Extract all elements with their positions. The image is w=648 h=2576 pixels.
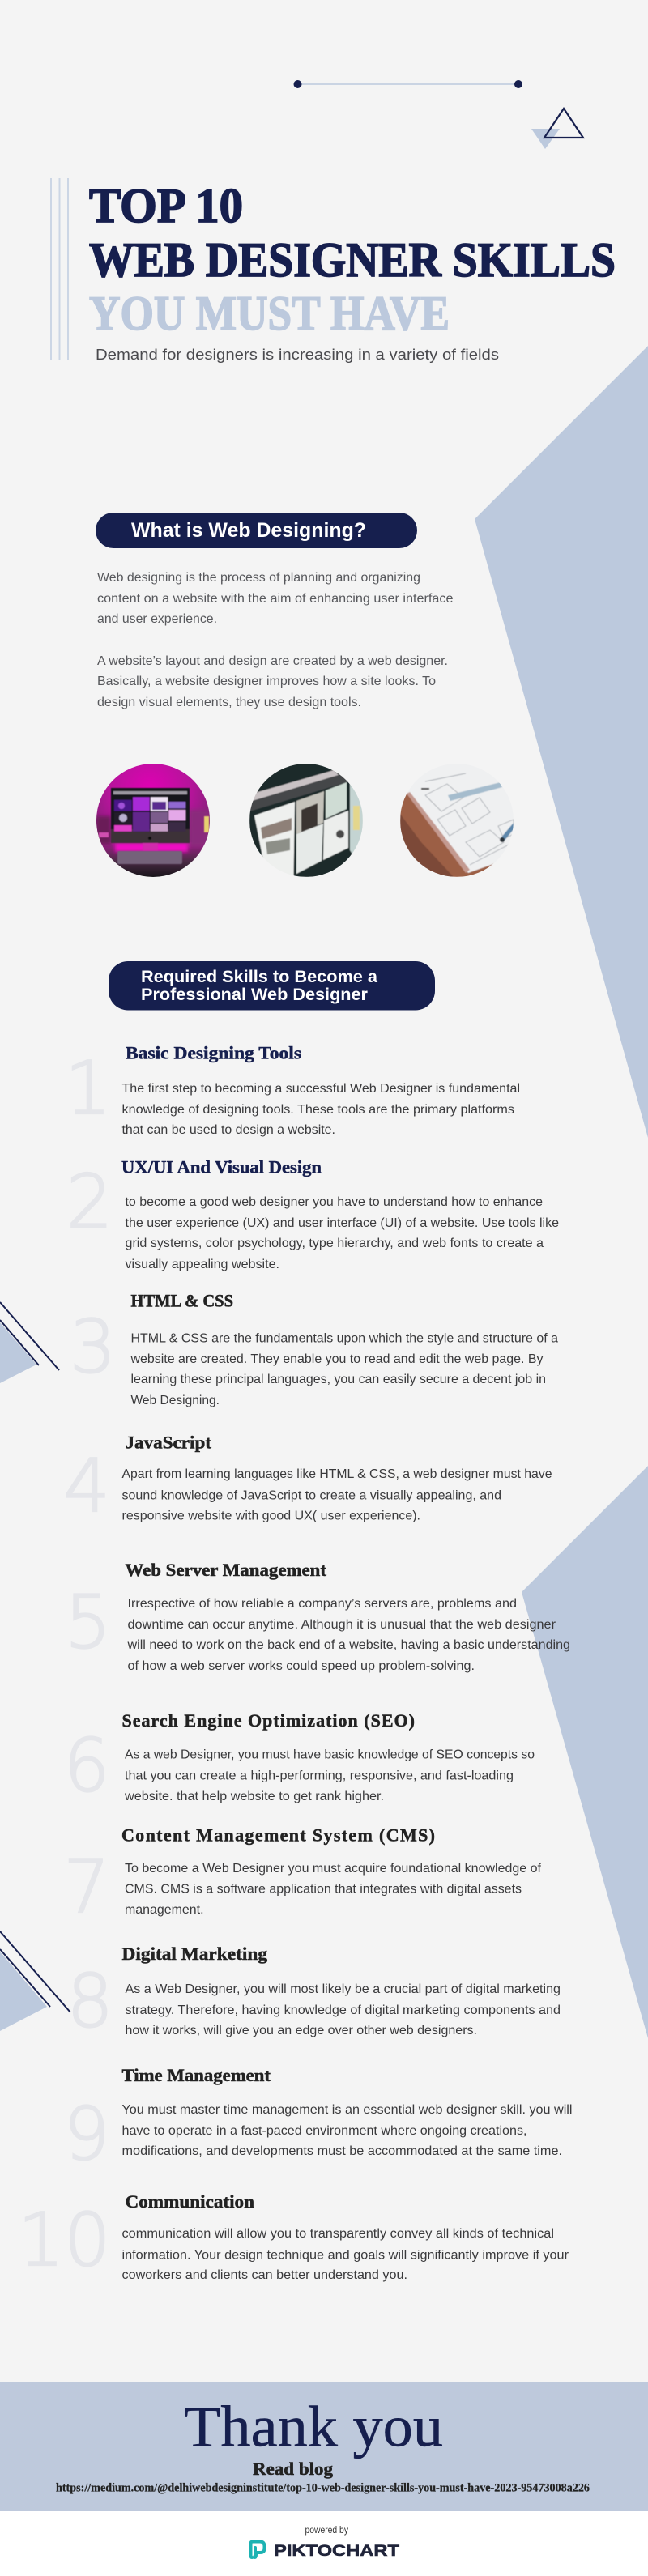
heading pill: What is Web Designing? <box>96 513 417 548</box>
footer background <box>0 2511 648 2576</box>
skill 5: Web Server Management: will need to work on the back end of a website, having a basic understanding <box>126 1638 570 1652</box>
text block: definition of web designing: content on a website with the aim of enhancing user interface <box>97 592 454 606</box>
skill 5: Web Server Management: Web Server Management <box>125 1560 327 1580</box>
skill 5: Web Server Management: 5 <box>65 1580 111 1665</box>
skill 9: Time Management: 9 <box>63 2092 110 2177</box>
skill 10: Communication <box>18 2191 569 2283</box>
skill 2: UX/UI And Visual Design: UX/UI And Visual Design <box>122 1156 322 1177</box>
skill 2: UX/UI And Visual Design <box>66 1156 559 1271</box>
skill 2: UX/UI And Visual Design: to become a good web designer you have to understand how to enhance <box>125 1195 543 1209</box>
heading pill: required skills: Required Skills to Become a <box>141 967 378 986</box>
skill 7: Content Management System: CMS. CMS is a software application that integrates with digital assets <box>125 1882 522 1897</box>
skill 3: HTML & CSS: Web Designing. <box>131 1394 220 1407</box>
skill 8: Digital Marketing: how it works, will give you an edge over other web designers. <box>125 2024 477 2037</box>
skill 10: Communication: communication will allow you to transparently convey all kinds of technical <box>122 2227 554 2241</box>
heading: thank you: Thank you <box>184 2394 443 2459</box>
title: YOU MUST HAVE <box>89 287 450 340</box>
skill 8: Digital Marketing: 8 <box>66 1959 113 2044</box>
icon: piktochart logo mark <box>251 2541 264 2557</box>
skill 3: HTML & CSS: HTML & CSS <box>131 1291 233 1310</box>
text block: definition of web designing: and user experience. <box>97 612 217 626</box>
skill 7: Content Management System <box>63 1825 542 1930</box>
skill 4: JavaScript: Apart from learning languages like HTML & CSS, a web designer must have <box>122 1467 552 1481</box>
skill 10: Communication: Communication <box>125 2191 254 2212</box>
skill 3: HTML & CSS: website are created. They enable you to read and edit the web page. By <box>130 1352 543 1366</box>
skill 1: Basic Designing Tools: 1 <box>65 1046 111 1131</box>
skill 9: Time Management <box>63 2065 572 2177</box>
skill 10: Communication: information. Your design technique and goals will significantly improve if your <box>122 2248 569 2263</box>
skill 4: JavaScript: responsive website with good UX( user experience). <box>122 1509 420 1522</box>
skill 6: Search Engine Optimization: website. that help website to get rank higher. <box>124 1790 384 1803</box>
footer: powered by piktochart <box>251 2526 399 2560</box>
skill 1: Basic Designing Tools: knowledge of designing tools. These tools are the primary platforms <box>122 1103 514 1117</box>
decoration: left triangle with lines, upper <box>0 1302 59 1383</box>
skill 5: Web Server Management: downtime can occur anytime. Although it is unusual that the web designer <box>128 1618 556 1632</box>
skill 7: Content Management System: management. <box>125 1903 204 1917</box>
skill 5: Web Server Management: Irrespective of how reliable a company’s servers are, problems and <box>128 1597 517 1611</box>
text block: definition of web designing: A website’s layout and design are created by a web designer. <box>97 654 448 668</box>
skill 3: HTML & CSS: HTML & CSS are the fundamentals upon which the style and structure of a <box>131 1331 558 1346</box>
skill 1: Basic Designing Tools: that can be used to design a website. <box>122 1123 335 1137</box>
skill 2: UX/UI And Visual Design: 2 <box>66 1160 113 1245</box>
decoration: left triangle with lines, lower <box>0 1931 70 2031</box>
skill 4: JavaScript: sound knowledge of JavaScript to create a visually appealing, and <box>122 1488 501 1503</box>
skill 8: Digital Marketing <box>66 1944 561 2044</box>
skill 9: Time Management: have to operate in a fast-paced environment where ongoing creations, <box>122 2124 526 2138</box>
skill 1: Basic Designing Tools: Basic Designing Tools <box>126 1043 301 1062</box>
photo: wireframe sketches in a notebook <box>400 764 514 877</box>
skill 9: Time Management: You must master time management is an essential web designer skill. you will <box>122 2103 572 2117</box>
skill 1: Basic Designing Tools: The first step to becoming a successful Web Designer is fundamental <box>122 1082 520 1096</box>
skill 10: Communication: coworkers and clients can better understand you. <box>122 2268 407 2282</box>
text block: definition of web designing: Basically, a website designer improves how a site looks. To <box>97 675 436 688</box>
photo: web pages on a screen <box>249 764 363 877</box>
skill 7: Content Management System: To become a Web Designer you must acquire foundational knowledge of <box>125 1862 542 1876</box>
skill 5: Web Server Management <box>65 1560 570 1673</box>
skill 2: UX/UI And Visual Design: visually appealing website. <box>125 1258 279 1271</box>
icon: triangles <box>531 109 583 149</box>
link: blog url: https://medium.com/@delhiwebdesigninstitute/top-10-web-designer-skills-you-must-have-2023-95473008a226 <box>56 2481 590 2494</box>
subtitle: Demand for designers is increasing in a variety of fields <box>96 346 499 363</box>
background shape: upper right polygon <box>475 346 648 1138</box>
text block: definition of web designing: Web designing is the process of planning and organizing <box>97 571 420 585</box>
skill 2: UX/UI And Visual Design: grid systems, color psychology, type hierarchy, and web fonts to create a <box>125 1237 544 1250</box>
text block: definition of web designing <box>97 571 454 709</box>
skill 6: Search Engine Optimization: 6 <box>63 1723 110 1808</box>
skill 4: JavaScript <box>63 1432 552 1529</box>
skill 6: Search Engine Optimization: that you can create a high-performing, responsive, and fast-loading <box>125 1769 514 1783</box>
photo: desktop monitor with magenta glow <box>96 764 210 877</box>
heading pill: What is Web Designing?: What is Web Designing? <box>131 519 366 542</box>
skill 5: Web Server Management: of how a web server works could speed up problem-solving. <box>128 1659 475 1673</box>
skill 8: Digital Marketing: As a Web Designer, you will most likely be a crucial part of digital marketing <box>125 1982 561 1996</box>
panel: thank you band <box>0 2382 648 2511</box>
skill 2: UX/UI And Visual Design: the user experience (UX) and user interface (UI) of a website. Use tools like <box>125 1216 559 1230</box>
skill 10: Communication: 10 <box>18 2198 111 2283</box>
skill 7: Content Management System: Content Management System (CMS) <box>122 1825 435 1845</box>
skill 4: JavaScript: JavaScript <box>125 1432 212 1453</box>
skill 3: HTML & CSS: 3 <box>70 1305 116 1390</box>
title: TOP 10 <box>89 179 243 232</box>
skill 3: HTML & CSS: learning these principal languages, you can easily secure a decent job in <box>131 1373 546 1386</box>
background shape: lower right polygon <box>522 1466 648 2038</box>
label: read blog: Read blog <box>253 2459 333 2479</box>
skill 8: Digital Marketing: strategy. Therefore, having knowledge of digital marketing components and <box>125 2003 561 2017</box>
skill 9: Time Management: Time Management <box>122 2065 271 2085</box>
heading pill: required skills: Professional Web Designer <box>141 985 369 1004</box>
skill 6: Search Engine Optimization: As a web Designer, you must have basic knowledge of SEO concepts so <box>125 1748 535 1762</box>
skill 7: Content Management System: 7 <box>63 1845 110 1930</box>
skill 9: Time Management: modifications, and developments must be accommodated at the same time. <box>122 2144 562 2158</box>
decoration: three vertical lines <box>51 178 68 360</box>
skill 6: Search Engine Optimization: Search Engine Optimization (SEO) <box>122 1710 415 1731</box>
skill 4: JavaScript: 4 <box>63 1444 110 1529</box>
title: WEB DESIGNER SKILLS <box>89 233 616 287</box>
skill 1: Basic Designing Tools <box>65 1043 520 1137</box>
decoration: connector with two dots <box>293 80 522 88</box>
skill 8: Digital Marketing: Digital Marketing <box>122 1944 267 1964</box>
heading pill: required skills <box>109 961 435 1011</box>
skill 6: Search Engine Optimization <box>63 1710 535 1808</box>
footer: powered by piktochart: powered by <box>305 2526 348 2536</box>
text block: definition of web designing: design visual elements, they use design tools. <box>97 696 361 709</box>
title <box>89 179 616 340</box>
skill 3: HTML & CSS <box>70 1291 558 1407</box>
wordmark: PIKTOCHART <box>274 2542 399 2560</box>
